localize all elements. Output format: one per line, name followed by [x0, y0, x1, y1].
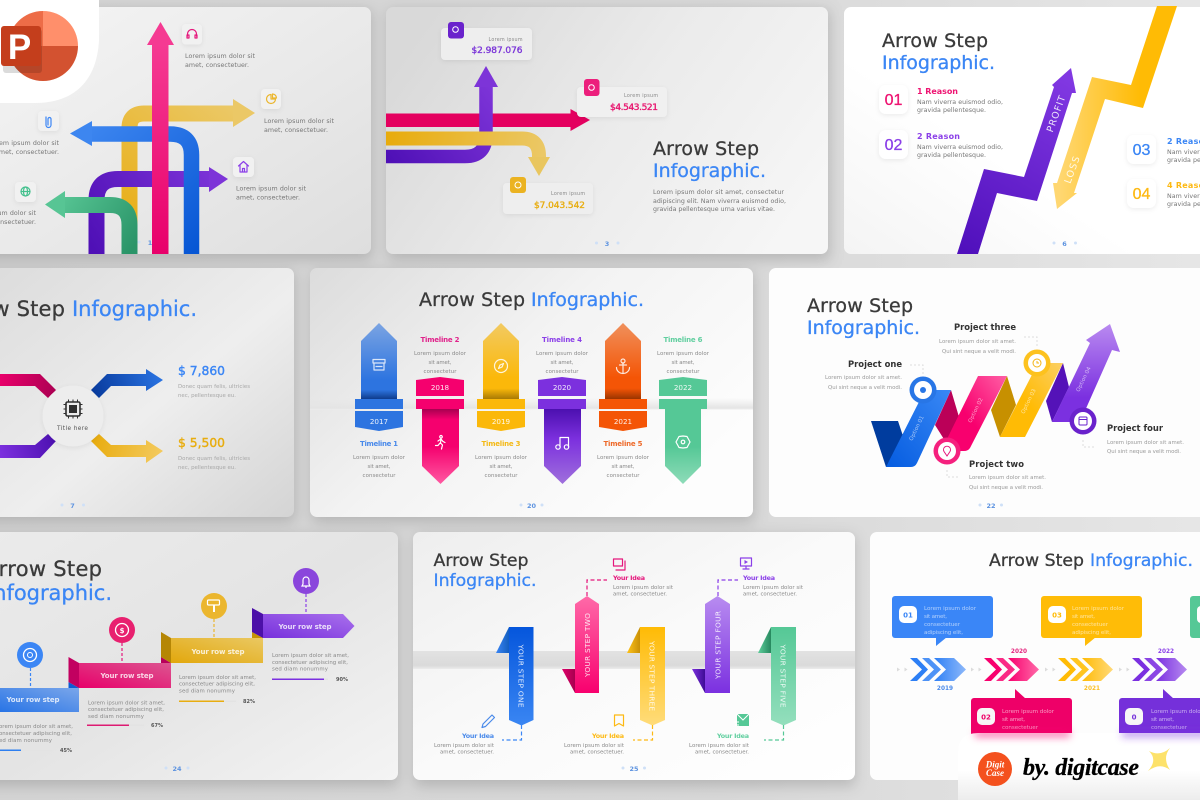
pagination: [138, 239, 153, 247]
callout 04: 0: [1132, 714, 1137, 722]
title: Arrow Step: [434, 551, 529, 571]
card: pink value: Lorem ipsum: [624, 93, 658, 99]
item: globe note: [0, 182, 37, 226]
callout 03: adipiscing elit,: [1072, 630, 1111, 636]
callout 02: [971, 689, 1072, 743]
pagination: [978, 502, 1003, 510]
panel: crossing arrows slide: [0, 7, 371, 254]
item: headphones note: [182, 24, 256, 69]
reason 01: [879, 85, 1003, 114]
label: project two: [947, 459, 1046, 491]
ribbon: step one: YOUR STEP ONE: [517, 644, 526, 708]
ribbon: step three: Your Idea: [591, 732, 624, 740]
label: project three: [939, 322, 1037, 355]
arrow: pink branch: [0, 374, 56, 398]
card: purple value: [441, 22, 532, 60]
timeline 1: 2017: [370, 417, 388, 426]
arrow: loss: [1053, 6, 1177, 209]
chevron group 2021: [1045, 658, 1113, 692]
icon: powerpoint: P: [8, 28, 31, 67]
title: Infographic.: [531, 289, 644, 311]
title: Infographic.: [1090, 551, 1193, 571]
pagination: [60, 502, 85, 510]
callout 01: Lorem ipsum dolor: [924, 606, 977, 612]
ribbon arrow: Option 01: [908, 415, 926, 442]
callout green: [1190, 596, 1200, 638]
timeline 5: 2021: [614, 417, 632, 426]
ribbon: step two: Your Idea: [612, 574, 645, 582]
step: purple: consectetuer adipiscing elit,: [272, 660, 348, 666]
arrow: profit: [957, 68, 1076, 254]
timeline 4: Timeline 4: [542, 336, 582, 344]
hub circle: Title here: [56, 426, 88, 432]
arrow: pink up: [147, 22, 174, 254]
label: project two: Lorem ipsum dolor sit amet.: [969, 475, 1046, 481]
timeline 5: consectetur: [606, 473, 640, 479]
ribbon: step four: [692, 558, 803, 693]
timeline 2: Lorem ipsum dolor: [414, 351, 467, 357]
arrow: yellow down: [386, 138, 550, 176]
ribbon: step four: Lorem ipsum dolor sit: [743, 585, 803, 591]
arrow: yellow: [130, 99, 255, 254]
marker: pink: [934, 438, 960, 464]
reason 01: gravida pellentesque.: [917, 107, 986, 114]
timeline 4: 2020: [553, 383, 572, 392]
callout 03: [1041, 596, 1142, 646]
step: yellow: Your row step: [190, 648, 244, 656]
item: headphones note: amet, consectetuer.: [185, 62, 249, 69]
timeline 3: [475, 323, 528, 479]
callout 04: consectetuer: [1151, 725, 1188, 731]
arrow: purple branch: [0, 434, 56, 458]
card: purple value: Lorem ipsum: [488, 37, 523, 43]
ribbon: step one: Your Idea: [461, 732, 494, 740]
timeline 6: consectetur: [666, 369, 700, 375]
reason 04: [1127, 179, 1200, 208]
stat: 5,500: $ 5,500: [178, 436, 225, 450]
chevron group 2022: 2022: [1158, 649, 1174, 655]
ribbon: step one: Lorem ipsum dolor sit: [434, 743, 494, 749]
callout 01: adipiscing elit,: [924, 630, 963, 636]
callout 03: Lorem ipsum dolor: [1072, 606, 1125, 612]
reason 02: 02: [885, 137, 902, 154]
ribbon: step five: amet, consectetuer.: [695, 750, 749, 756]
label: project two: Qui sint neque a velit modi.: [969, 485, 1043, 491]
timeline 6: Lorem ipsum dolor: [657, 351, 710, 357]
title: Arrow Step: [419, 289, 525, 311]
panel: ribbon projects slide: [769, 268, 1200, 517]
ribbon: step four: amet, consectetuer.: [743, 592, 797, 598]
reason 01: 1 Reason: [917, 87, 958, 96]
ribbon: step three: YOUR STEP THREE: [648, 640, 657, 711]
timeline 3: 2019: [492, 417, 511, 426]
hub circle: [42, 386, 104, 446]
label: project four: Project four: [1107, 423, 1164, 433]
item: paperclip note: [0, 111, 60, 156]
callout 01: sit amet,: [924, 614, 947, 620]
reason 03: [1127, 135, 1200, 164]
timeline 3: consectetur: [484, 473, 518, 479]
callout 02: Lorem ipsum dolor: [1002, 709, 1055, 715]
panel: timeline slide: [310, 268, 753, 517]
pagination: [622, 765, 646, 773]
callout 02: consectetuer: [1002, 725, 1039, 731]
timeline 4: consectetur: [546, 369, 579, 375]
callout 03: 03: [1052, 612, 1062, 620]
pagination: [520, 502, 544, 510]
stat: 7,860: [178, 364, 250, 399]
timeline 5: Lorem ipsum dolor: [597, 455, 650, 461]
ribbon arrow: Option 03: [1020, 388, 1038, 415]
arrow: blue branch: [91, 369, 163, 398]
panel: vertical ribbon steps slide: [413, 532, 855, 780]
card: yellow value: Lorem ipsum: [551, 191, 585, 197]
title: Arrow Step: [882, 30, 988, 52]
badge: by digitcase: [958, 731, 1200, 800]
title: Infographic.: [434, 571, 536, 591]
logo: digit case: Digit: [985, 760, 1005, 770]
ribbon: step two: YOUR STEP TWO: [583, 613, 592, 678]
item: house note: amet, consectetuer.: [236, 194, 300, 202]
item: pie note: [261, 89, 335, 134]
timeline 1: [353, 323, 406, 479]
timeline 2: sit amet,: [428, 360, 452, 366]
stat: 7,860: nec, pellentesque eu.: [178, 393, 236, 399]
logo: digit case: Case: [986, 768, 1004, 778]
panel: value arrows slide: [386, 7, 828, 254]
icon: yellow star: [1148, 748, 1170, 771]
ribbon arrow: [871, 324, 1120, 467]
timeline 6: [657, 336, 710, 484]
step: pink: Lorem ipsum dolor sit amet,: [88, 700, 165, 706]
arrow: blue: [70, 121, 192, 254]
step: blue: [0, 642, 79, 754]
arrow: profit: PROFIT: [1045, 94, 1068, 134]
timeline 3: Timeline 3: [482, 440, 521, 448]
timeline 1: Timeline 1: [360, 440, 398, 448]
timeline 1: consectetur: [362, 473, 396, 479]
reason 01: Nam viverra euismod odio,: [917, 99, 1003, 106]
title: Arrow Step: [989, 551, 1084, 571]
step: pink: consectetuer adipiscing elit,: [88, 707, 164, 713]
ribbon: step five: Lorem ipsum dolor sit: [689, 743, 749, 749]
ribbon: step three: amet, consectetuer.: [570, 750, 624, 756]
ribbon: step five: [689, 627, 796, 756]
item: pie note: Lorem ipsum dolor sit: [264, 118, 335, 125]
body text: [653, 189, 786, 213]
timeline 2: [414, 336, 467, 484]
arrow: green: [45, 191, 130, 254]
arrow: purple up: [386, 66, 498, 156]
title: Arrow Step: [653, 138, 759, 160]
panel: chevron timeline slide: [870, 532, 1200, 780]
logo: digit case: [978, 752, 1012, 786]
callout 01: 01: [903, 612, 913, 620]
callout 03: sit amet,: [1072, 614, 1095, 620]
step: purple: sed diam nonummy: [272, 666, 329, 672]
label: project one: Qui sint neque a velit modi.: [828, 385, 902, 391]
timeline 6: Timeline 6: [664, 336, 703, 344]
step: purple: [252, 568, 354, 683]
card: pink value: [577, 79, 667, 117]
ribbon: step four: Your Idea: [742, 574, 775, 582]
ribbon: step two: Lorem ipsum dolor sit: [613, 585, 673, 591]
card: purple value: $2.987.076: [472, 46, 523, 56]
label: project one: Project one: [848, 359, 902, 369]
chevron group 2019: [897, 658, 966, 692]
body text: gravida pellentesque urna varius vitae.: [653, 206, 775, 213]
chevron group 2022: [1119, 649, 1187, 681]
pagination: [1052, 240, 1077, 248]
reason 02: gravida pellentesque.: [917, 152, 986, 159]
ribbon: step five: YOUR STEP FIVE: [779, 644, 788, 708]
title: [434, 551, 536, 591]
timeline 4: sit amet,: [550, 360, 574, 366]
ribbon: step three: Lorem ipsum dolor sit: [564, 743, 624, 749]
step: yellow: Lorem ipsum dolor sit amet,: [179, 675, 256, 681]
step: yellow: [161, 593, 263, 705]
label: project one: Lorem ipsum dolor sit amet.: [825, 375, 902, 381]
pagination: [595, 240, 620, 248]
step: blue: 45%: [60, 748, 72, 754]
timeline 3: sit amet,: [490, 464, 513, 470]
timeline 1: sit amet,: [368, 464, 391, 470]
badge: powerpoint logo: [0, 0, 99, 103]
timeline 4: [536, 336, 589, 484]
reason 04: 04: [1133, 186, 1150, 203]
step: pink: sed diam nonummy: [88, 714, 145, 720]
step: purple: Lorem ipsum dolor sit amet,: [272, 653, 349, 659]
timeline 2: consectetur: [424, 369, 457, 375]
step: blue: Your row step: [6, 696, 60, 704]
step: yellow: consectetuer adipiscing elit,: [179, 682, 255, 688]
timeline 5: Timeline 5: [604, 440, 643, 448]
pagination: 7: [70, 502, 75, 510]
brand name: by. digitcase: [1023, 755, 1139, 781]
title: [882, 30, 995, 74]
timeline 2: 2018: [431, 383, 450, 392]
ribbon: step two: amet, consectetuer.: [613, 592, 667, 598]
chevron group 2021: 2021: [1084, 686, 1100, 692]
label: project three: Lorem ipsum dolor sit amet.: [939, 339, 1016, 345]
card: yellow value: $7.043.542: [534, 201, 585, 211]
callout 03: consectetuer: [1072, 622, 1109, 628]
pagination: 1: [148, 239, 153, 247]
pagination: 22: [986, 502, 996, 510]
reason 02: [879, 130, 1003, 159]
callout 01: [892, 596, 993, 646]
marker: purple: [1070, 408, 1096, 434]
label: project four: Qui sint neque a velit modi.: [1107, 449, 1181, 455]
arrow: loss: LOSS: [1063, 155, 1083, 185]
callout 02: sit amet,: [1002, 717, 1025, 723]
reason 03: 03: [1133, 142, 1150, 159]
chevron group 2020: 2020: [1011, 649, 1027, 655]
pagination: [164, 765, 190, 773]
pagination: 6: [1062, 240, 1067, 248]
card: yellow value: [503, 177, 593, 214]
label: project three: Project three: [954, 322, 1016, 332]
step: pink: Your row step: [100, 672, 154, 680]
body text: Lorem ipsum dolor sit amet, consectetur: [653, 189, 784, 196]
title: [807, 295, 920, 339]
stat: 7,860: Donec quam felis, ultricies: [178, 384, 250, 390]
step: purple: Your row step: [278, 623, 332, 631]
title: [0, 557, 112, 605]
timeline 6: sit amet,: [672, 360, 695, 366]
timeline 4: Lorem ipsum dolor: [536, 351, 589, 357]
title: [419, 289, 644, 311]
step: yellow: sed diam nonummy: [179, 688, 236, 694]
pagination: 25: [629, 765, 639, 773]
title: [653, 138, 766, 182]
stat: 5,500: Donec quam felis, ultricies: [178, 456, 250, 462]
step: yellow: 82%: [243, 699, 255, 705]
chevron group 2020: [971, 649, 1039, 681]
arrow: yellow branch: [91, 434, 163, 463]
title: Infographic.: [653, 160, 766, 182]
title: [989, 551, 1193, 571]
pagination: 3: [605, 240, 609, 248]
chevron group 2019: 2019: [937, 686, 953, 692]
arrow: purple: [96, 167, 228, 254]
ribbon arrow: Option 04: [1075, 366, 1093, 393]
ribbon arrow: Option 02: [967, 397, 985, 424]
label: project two: Project two: [969, 459, 1024, 469]
ribbon: step one: amet, consectetuer.: [440, 750, 494, 756]
step: pink: [68, 617, 171, 729]
ribbon: step three: [564, 627, 665, 756]
label: project three: Qui sint neque a velit modi.: [942, 349, 1016, 355]
marker: blue: [910, 376, 936, 404]
item: pie note: amet, consectetuer.: [264, 127, 328, 134]
body text: adipiscing elit. Nam viverra euismod odio,: [653, 198, 786, 205]
title: [0, 297, 197, 321]
marker: yellow: [1024, 350, 1050, 376]
timeline 5: sit amet,: [612, 464, 635, 470]
ribbon: step one: [434, 627, 534, 756]
reason 02: 2 Reason: [917, 132, 960, 141]
stat: 5,500: [178, 436, 250, 471]
ribbon: step two: [562, 559, 673, 693]
callout 01: consectetuer: [924, 622, 961, 628]
item: house note: [233, 157, 307, 202]
reason 01: 01: [885, 92, 902, 109]
item: house note: Lorem ipsum dolor sit: [236, 186, 307, 192]
title: Infographic.: [882, 52, 995, 74]
panel: title hub slide: [0, 268, 294, 517]
timeline 6: 2022: [674, 383, 692, 392]
title: Infographic.: [72, 297, 197, 321]
timeline 5: [597, 323, 650, 479]
label: project one: [825, 359, 923, 391]
label: project four: Lorem ipsum dolor sit amet.: [1107, 440, 1184, 446]
callout 04: [1119, 689, 1200, 743]
ribbon: step five: Your Idea: [716, 732, 749, 740]
step: pink: $: [120, 627, 125, 635]
pagination: 20: [527, 502, 536, 510]
panel: row steps slide: [0, 532, 398, 780]
item: headphones note: Lorem ipsum dolor sit: [185, 53, 256, 60]
reason 02: Nam viverra euismod odio,: [917, 144, 1003, 151]
panel: profit and loss slide: [844, 6, 1200, 254]
timeline 3: Lorem ipsum dolor: [475, 455, 528, 461]
stat: 5,500: nec, pellentesque eu.: [178, 465, 236, 471]
card: pink value: $4.543.521: [610, 103, 658, 113]
label: project four: [1083, 423, 1184, 455]
stat: 7,860: $ 7,860: [178, 364, 225, 378]
callout 02: 02: [981, 714, 991, 722]
step: purple: 90%: [336, 677, 348, 683]
callout 04: sit amet,: [1151, 717, 1174, 723]
pagination: 24: [172, 765, 182, 773]
timeline 2: Timeline 2: [420, 336, 460, 344]
ribbon: step four: YOUR STEP FOUR: [713, 611, 722, 680]
arrow: pink right: [386, 109, 590, 131]
title: Arrow Step: [807, 295, 913, 317]
step: pink: 67%: [151, 723, 163, 729]
timeline 1: Lorem ipsum dolor: [353, 455, 406, 461]
title: Infographic.: [807, 317, 920, 339]
